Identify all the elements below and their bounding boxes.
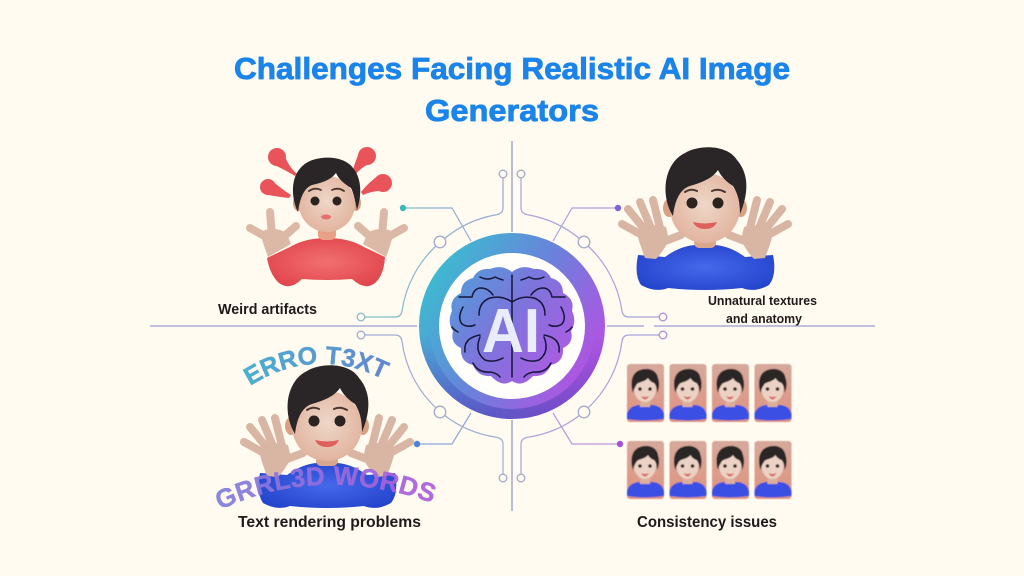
distorted text: ERRO T3XT: ERRO T3XT xyxy=(242,346,391,386)
red sweater xyxy=(267,238,385,286)
label: unnatural textures: and anatomy xyxy=(726,311,803,326)
title xyxy=(234,51,790,128)
label: unnatural textures xyxy=(708,293,817,326)
title: Challenges Facing Realistic AI Image xyxy=(234,51,790,86)
panel: consistency portraits xyxy=(627,364,792,499)
distorted text: GRRL3D WORDS: GRRL3D WORDS xyxy=(216,466,436,508)
title: Generators xyxy=(425,93,599,128)
panel: unnatural textures character xyxy=(622,147,788,290)
panel: weird artifacts character xyxy=(250,147,404,286)
icon: red blobs xyxy=(260,147,392,198)
AI label: AI xyxy=(482,297,540,366)
label: consistency issues: Consistency issues xyxy=(637,514,777,531)
AI ring xyxy=(424,238,600,414)
label: weird artifacts: Weird artifacts xyxy=(218,302,317,318)
label: text rendering problems: Text rendering problems xyxy=(238,514,421,531)
label: unnatural textures: Unnatural textures xyxy=(708,293,817,308)
hands xyxy=(250,212,296,257)
circuit lines xyxy=(150,141,875,511)
brain icon xyxy=(450,267,574,384)
panel: text rendering character xyxy=(244,365,410,508)
